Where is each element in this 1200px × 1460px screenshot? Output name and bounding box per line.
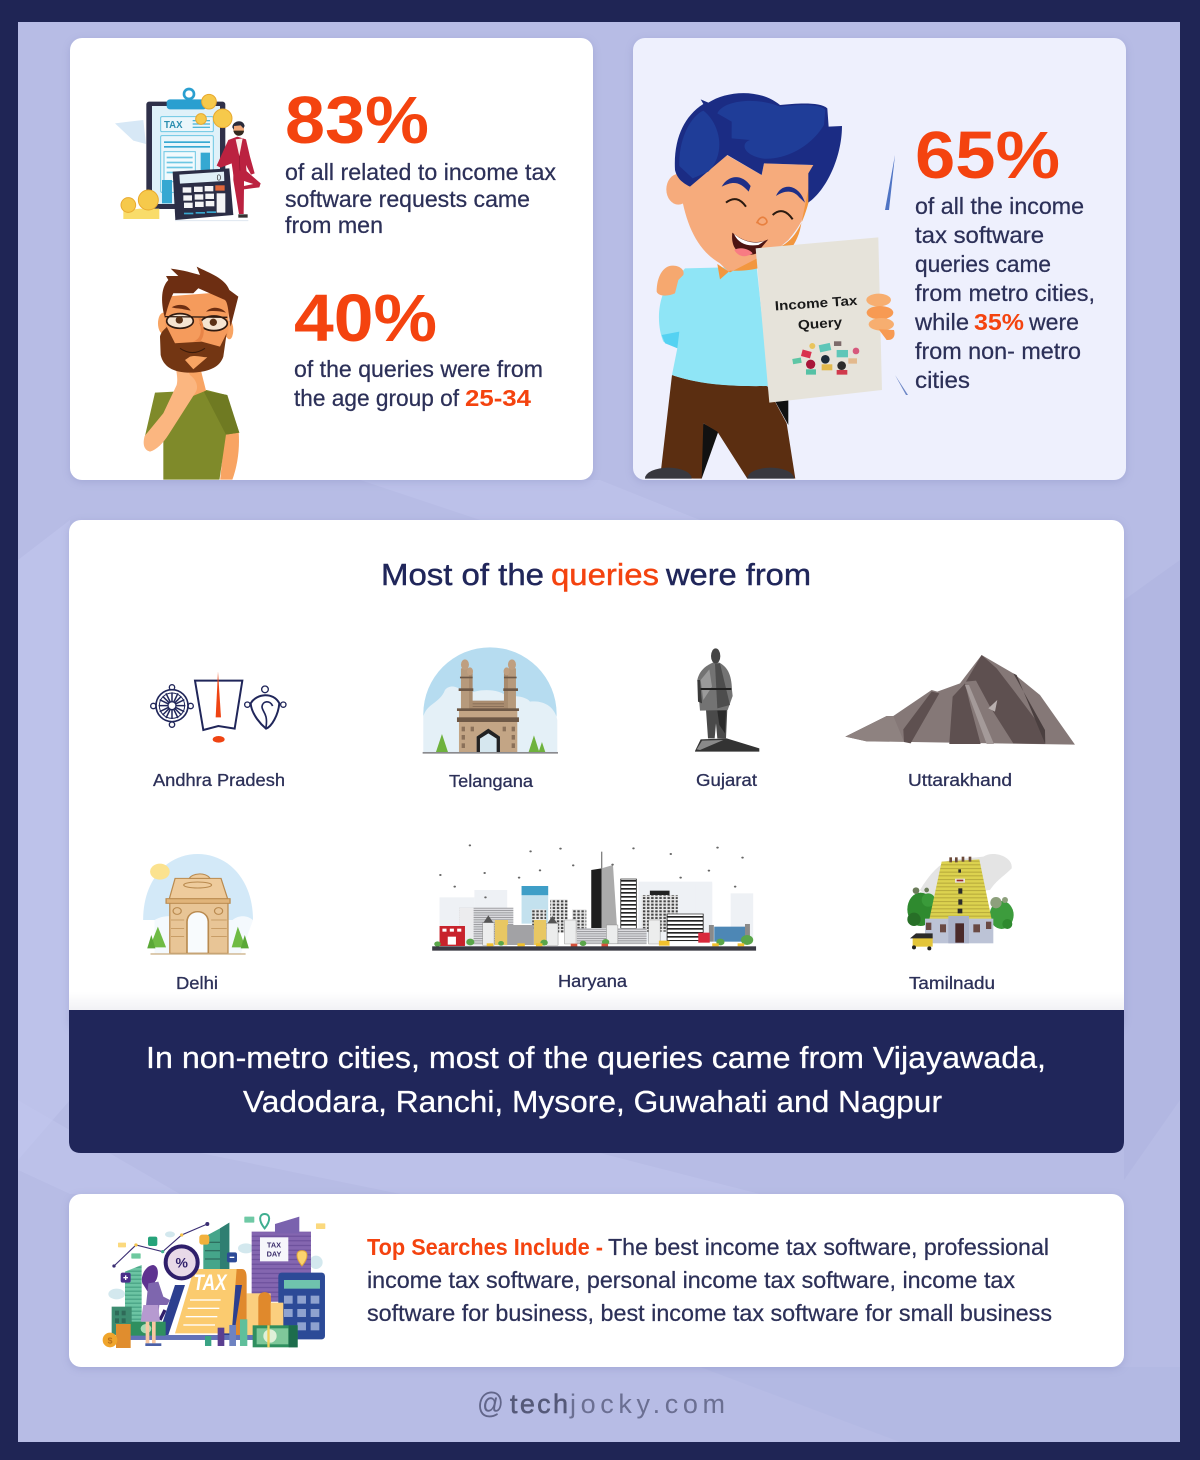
- decorative speech stroke top: [885, 155, 895, 210]
- heading: were from: [665, 557, 811, 592]
- text: top searches: [367, 1234, 1052, 1326]
- label: Gujarat: Gujarat: [696, 770, 757, 790]
- icon: tax clipboard with calculator and man: [115, 89, 261, 221]
- heading: queries: [551, 557, 659, 592]
- text: top searches: income tax software, personal income tax software, income tax: [367, 1267, 1016, 1293]
- icon: smiling boy holding query paper: [645, 93, 895, 489]
- panel: men and age statistics: [70, 38, 593, 482]
- icon: tax clipboard with calculator and man: 0: [217, 173, 222, 182]
- icon: Andhra Pradesh symbols: [151, 672, 286, 743]
- icon: tax analysis illustration: $: [108, 1335, 113, 1345]
- stat: 40 percent: [294, 281, 543, 411]
- stat: 83 percent: from men: [285, 212, 383, 238]
- icon: tax analysis illustration: DAY: [267, 1250, 281, 1259]
- label: Andhra Pradesh: Andhra Pradesh: [153, 770, 285, 790]
- stat: 65 percent: while: [914, 309, 969, 335]
- icon: Uttarakhand mountain: [845, 655, 1075, 745]
- icon: Statue of Unity: [695, 648, 759, 752]
- panel: top searches: [69, 1194, 1124, 1367]
- stat: 83 percent: [285, 83, 556, 238]
- label: Tamilnadu: Tamilnadu: [909, 973, 995, 993]
- text: top searches: The best income tax software, professional: [608, 1234, 1049, 1260]
- stat: 65 percent: queries came: [915, 251, 1051, 277]
- stat: 65 percent: from metro cities,: [915, 280, 1095, 306]
- icon: India Gate: [143, 854, 253, 955]
- icon: tax analysis illustration: [103, 1214, 325, 1348]
- icon: Charminar: [422, 647, 558, 754]
- stat: 83 percent: software requests came: [285, 186, 530, 212]
- stat: 65 percent: tax software: [915, 222, 1044, 248]
- banner: non-metro cities: Vadodara, Ranchi, Mysore, Guwahati and Nagpur: [243, 1084, 942, 1119]
- footer: techjocky brand: tech: [510, 1389, 568, 1419]
- stat: 65 percent: [914, 118, 1095, 393]
- footer: techjocky brand: jocky.com: [569, 1389, 725, 1419]
- label: Uttarakhand: Uttarakhand: [908, 770, 1012, 790]
- panel: metro cities statistic: [633, 38, 1126, 489]
- icon: Haryana city skyline: [432, 844, 756, 951]
- stat: 40 percent: 25-34: [465, 385, 531, 411]
- icon: tax clipboard with calculator and man: TAX: [164, 120, 183, 131]
- label: Delhi: Delhi: [176, 973, 218, 993]
- heading: Most of the: [381, 557, 544, 592]
- panel: states with the most queries: [69, 520, 1124, 1030]
- stat: 65 percent: from non- metro: [915, 338, 1081, 364]
- heading: [381, 557, 811, 592]
- stat: 65 percent: cities: [915, 367, 970, 393]
- stat: 40 percent: 40%: [294, 281, 437, 356]
- text: top searches: Top Searches Include -: [367, 1234, 603, 1260]
- decorative speech stroke bottom: [895, 375, 908, 395]
- icon: smiling boy holding query paper: Query: [797, 315, 843, 333]
- stat: 65 percent: of all the income: [915, 193, 1084, 219]
- icon: tax analysis illustration: TAX: [193, 1270, 228, 1295]
- stat: 40 percent: the age group of: [294, 385, 460, 411]
- icon: smiling boy holding query paper: Income Tax: [774, 293, 858, 314]
- stat: 83 percent: 83%: [285, 83, 429, 158]
- label: Telangana: Telangana: [449, 771, 533, 791]
- banner: non-metro cities: In non-metro cities, most of the queries came from Vijayawada,: [146, 1040, 1046, 1075]
- stat: 65 percent: were: [1028, 309, 1079, 335]
- banner: non-metro cities: [69, 1010, 1124, 1153]
- text: top searches: software for business, best income tax software for small business: [367, 1300, 1052, 1326]
- label: Haryana: Haryana: [558, 971, 627, 991]
- icon: tax analysis illustration: TAX: [267, 1241, 281, 1250]
- icon: Tamil Nadu temple: [907, 854, 1014, 950]
- icon: thinking bearded man: [144, 267, 239, 482]
- stat: 65 percent: 35%: [974, 309, 1024, 335]
- icon: tax analysis illustration: %: [175, 1254, 188, 1270]
- stat: 65 percent: 65%: [915, 118, 1060, 193]
- stat: 40 percent: of the queries were from: [294, 356, 543, 382]
- footer: techjocky brand: @: [477, 1387, 504, 1420]
- stat: 83 percent: of all related to income tax: [285, 159, 556, 185]
- footer: techjocky brand: [477, 1387, 725, 1420]
